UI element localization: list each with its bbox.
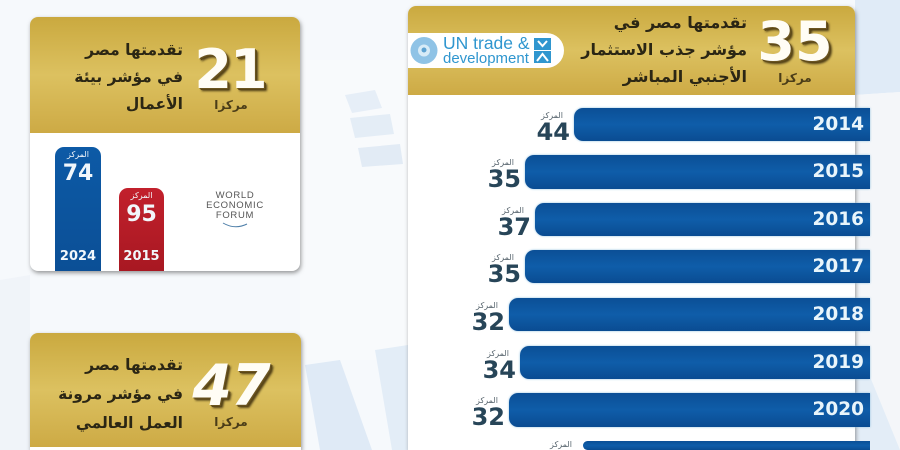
heading text: الأجنبي المباشر xyxy=(623,67,747,86)
rank: المركز xyxy=(476,301,498,310)
bar: 2014 xyxy=(812,114,864,135)
bar: 2024 rank 74: 2024 xyxy=(60,249,96,264)
heading text xyxy=(58,356,183,432)
rank number 35: 35 xyxy=(757,10,833,73)
heading text: في مؤشر بيئة xyxy=(74,68,183,86)
bar: 2015 rank 95 xyxy=(119,188,164,271)
rank number 21: 21 xyxy=(194,38,266,101)
heading text: تقدمتها مصر xyxy=(85,356,183,374)
rank number 47: 47 xyxy=(192,353,270,419)
rank: 32 xyxy=(472,308,505,336)
rank: المركز xyxy=(541,111,563,120)
rank: المركز xyxy=(550,440,572,449)
logo: UN trade and development xyxy=(408,33,564,68)
bar: 2024 rank 74: المركز xyxy=(67,150,89,159)
rank: المركز xyxy=(476,396,498,405)
heading text: في مؤشر مرونة xyxy=(58,385,183,403)
bar: 2020 xyxy=(812,399,864,420)
heading text xyxy=(580,13,747,86)
bar: 2016 xyxy=(812,209,864,230)
logo: World Economic Forum xyxy=(206,190,264,228)
bar: 2018 xyxy=(812,304,864,325)
header: FDI xyxy=(408,6,855,95)
bar: 2015 rank 95: 2015 xyxy=(123,249,160,264)
header: labour resilience xyxy=(30,333,301,447)
bar: 2024 rank 74: 74 xyxy=(63,161,93,186)
bar: 2015 rank 95: المركز xyxy=(131,191,152,200)
heading text: تقدمتها مصر في xyxy=(614,13,747,32)
bar xyxy=(525,155,870,189)
logo: World Economic Forum: WORLD xyxy=(216,190,254,201)
bar xyxy=(535,203,870,236)
bar xyxy=(520,346,870,379)
bar xyxy=(574,108,870,141)
rank label: مركزا xyxy=(778,71,812,85)
bar row: 2018 rank 32 xyxy=(472,296,872,336)
rank label: مركزا xyxy=(214,415,248,429)
logo: World Economic Forum: FORUM xyxy=(216,210,254,221)
bar xyxy=(525,250,870,283)
bar: 2015 rank 95: 95 xyxy=(126,202,157,227)
bar row: 2016 rank 37 xyxy=(498,202,872,241)
bar row: 2014 rank 44 xyxy=(537,106,872,146)
bar xyxy=(509,298,870,331)
rank: 32 xyxy=(472,403,505,431)
icon: UN emblem xyxy=(410,37,438,64)
header: business environment xyxy=(30,17,300,133)
bar: 2019 xyxy=(812,352,864,373)
rank: المركز xyxy=(492,253,514,262)
rank: 44 xyxy=(537,118,570,146)
heading text xyxy=(74,41,183,113)
rank: المركز xyxy=(487,349,509,358)
panel: global labour resilience index xyxy=(30,333,301,450)
rank: 35 xyxy=(488,165,521,193)
logo text: development xyxy=(443,50,529,67)
rank: المركز xyxy=(492,158,514,167)
bar xyxy=(583,441,870,450)
bar row: 2021 partially cropped xyxy=(550,440,870,450)
heading text: تقدمتها مصر xyxy=(85,41,183,59)
rank: 37 xyxy=(498,213,531,241)
bar row: 2017 rank 35 xyxy=(488,248,872,288)
icon: brand mark xyxy=(534,38,551,63)
rank: 34 xyxy=(483,356,516,384)
panel: foreign direct investment index xyxy=(408,6,855,450)
rank label: مركزا xyxy=(214,98,248,112)
rank: 35 xyxy=(488,260,521,288)
panel: business environment index xyxy=(30,17,300,271)
bar: 2024 rank 74 xyxy=(55,147,101,271)
logo: World Economic Forum: ECONOMIC xyxy=(206,200,264,211)
heading text: الأعمال xyxy=(126,95,183,113)
heading text: العمل العالمي xyxy=(76,414,183,432)
bar row: 2015 rank 35 xyxy=(488,154,872,193)
bar row: 2020 rank 32 xyxy=(472,392,872,431)
heading text: مؤشر جذب الاستثمار xyxy=(581,40,747,59)
logo text xyxy=(443,33,530,67)
bar row: 2019 rank 34 xyxy=(483,344,872,384)
bar: 2017 xyxy=(812,256,864,277)
bar xyxy=(509,393,870,427)
rank: المركز xyxy=(502,206,524,215)
logo text: UN trade & xyxy=(443,33,530,53)
bar: 2015 xyxy=(812,161,864,182)
